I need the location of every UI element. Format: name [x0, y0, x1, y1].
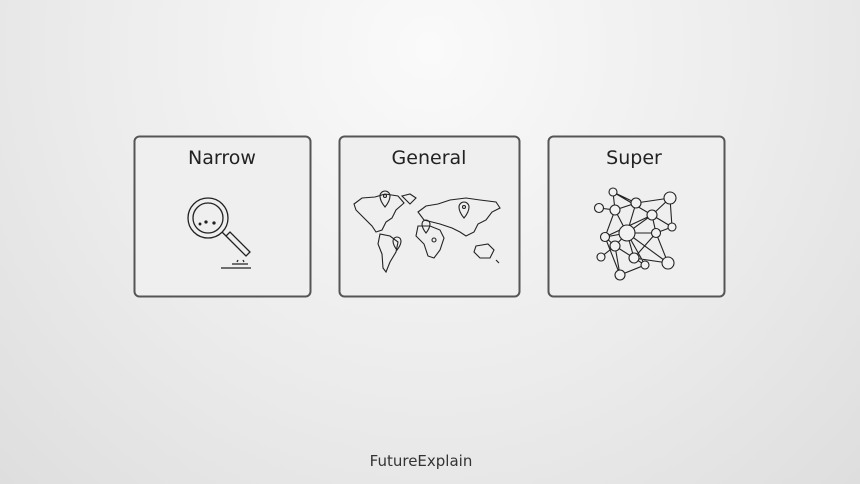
panel: super — [548, 136, 724, 296]
heading: general: General — [392, 147, 466, 169]
heading: super: Super — [606, 147, 662, 169]
panel: general — [340, 136, 520, 296]
heading: narrow: Narrow — [188, 147, 256, 169]
footer brand: FutureExplain — [370, 452, 472, 470]
icon: world map — [354, 191, 500, 272]
icon: network — [594, 188, 676, 280]
panel: narrow — [134, 136, 310, 296]
icon: magnifying glass — [188, 198, 251, 268]
